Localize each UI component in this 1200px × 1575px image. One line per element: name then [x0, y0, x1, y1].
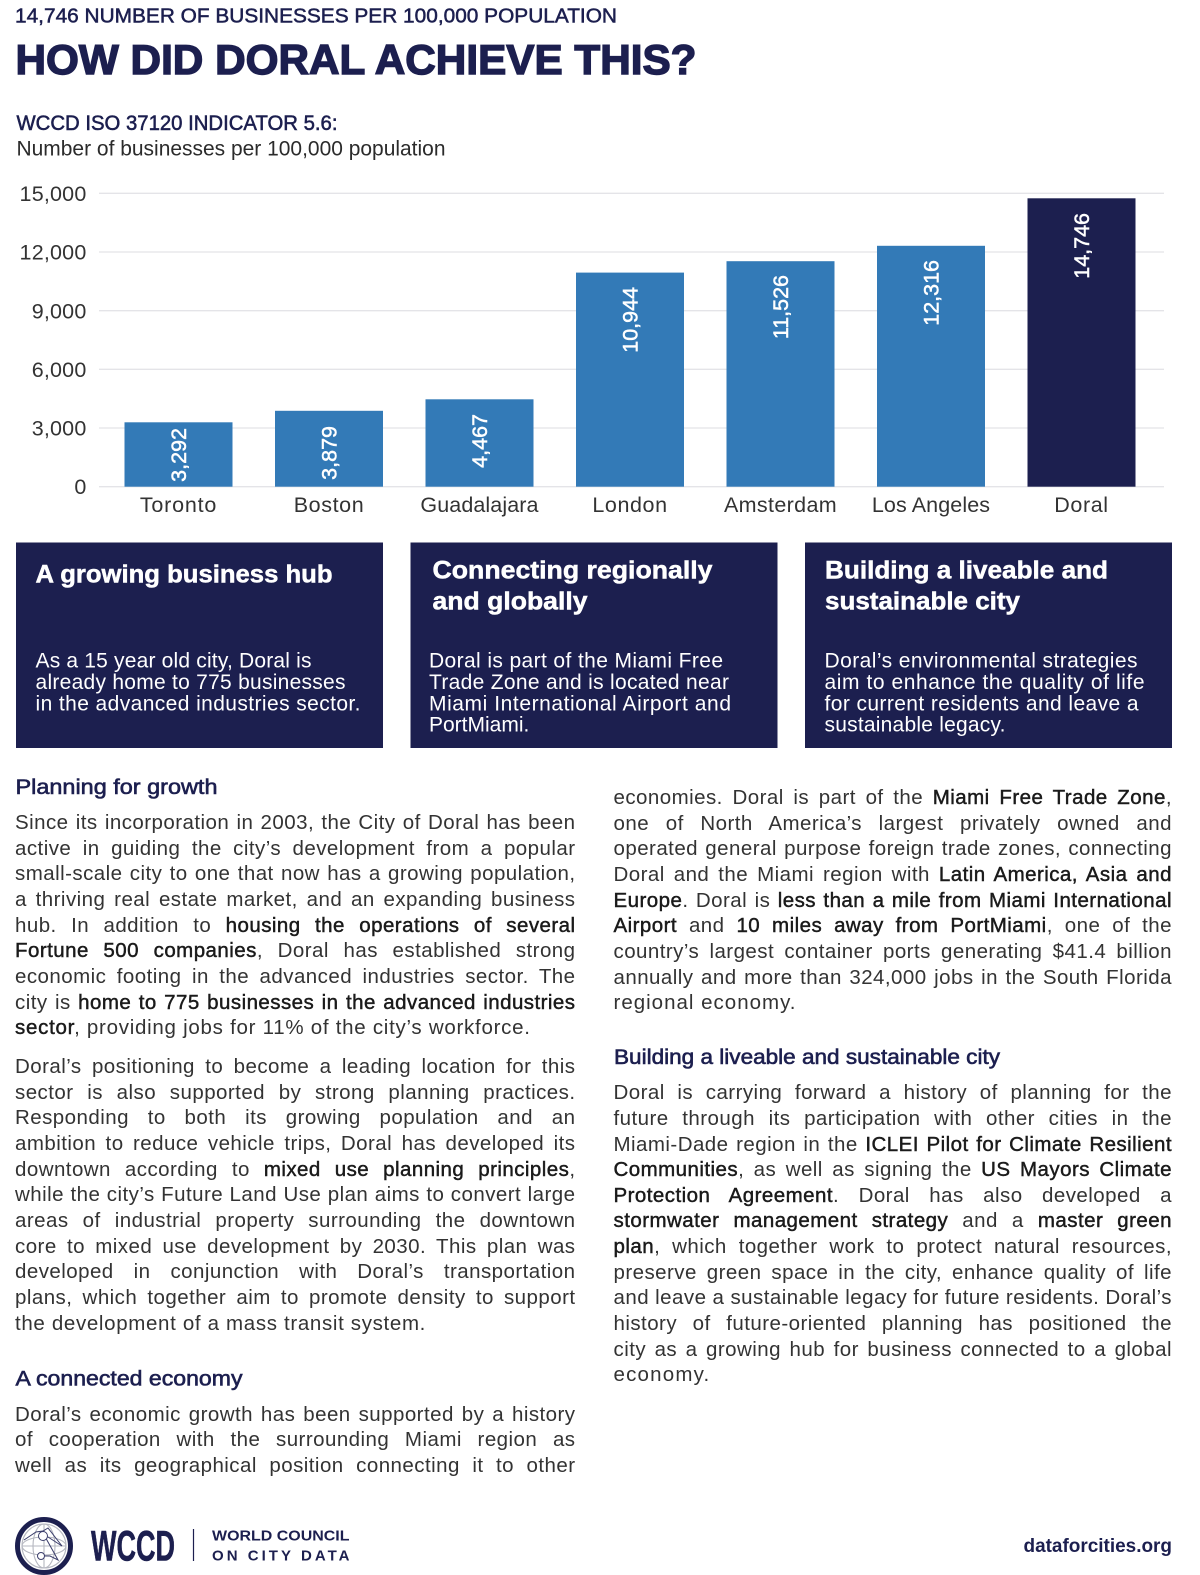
category labels	[140, 493, 1109, 517]
text block: building a liveable and sustainable city: city as a growing hub for business connected to a global	[614, 1338, 1172, 1361]
y axis labels	[20, 182, 86, 499]
category labels: Amsterdam	[724, 493, 837, 517]
text block: building a liveable and sustainable city: future through its participation with other cities in the	[614, 1107, 1172, 1130]
y axis labels: 12,000	[20, 241, 86, 265]
text block: a connected economy	[15, 1403, 576, 1477]
category labels: Boston	[294, 493, 364, 517]
panel: building a liveable and sustainable city: aim to enhance the quality of life	[824, 671, 1144, 694]
panel: connecting regionally and globally	[410, 542, 778, 748]
footer logo	[18, 1520, 350, 1572]
text block: planning for growth paragraph 2: areas of industrial property surrounding the downtown	[15, 1209, 576, 1232]
bar values: 3,879	[318, 426, 342, 480]
chart heading	[16, 112, 446, 161]
text block: a connected economy continued	[613, 786, 1172, 1014]
text block: planning for growth paragraph 2: developed in conjunction with Doral’s transportation	[15, 1260, 576, 1283]
text block: planning for growth paragraph 2: Doral’s positioning to become a leading location for this	[15, 1055, 576, 1078]
panel: connecting regionally and globally: Doral is part of the Miami Free	[429, 650, 723, 673]
text block: planning for growth paragraph 1: hub. In addition to housing the operations of several	[15, 914, 576, 937]
panel: building a liveable and sustainable city: sustainable legacy.	[824, 714, 1006, 737]
bar values: 14,746	[1070, 213, 1094, 279]
chart heading: WCCD ISO 37120 INDICATOR 5.6:	[16, 112, 338, 135]
eyebrow heading: 14,746 NUMBER OF BUSINESSES PER 100,000 POPULATION	[15, 6, 617, 28]
bar values: 11,526	[769, 275, 793, 339]
heading: a connected economy: A connected economy	[16, 1368, 243, 1391]
footer logo: WORLD COUNCIL	[212, 1528, 350, 1545]
text block: planning for growth paragraph 2: while the city’s Future Land Use plan aims to convert large	[15, 1183, 576, 1206]
text block: planning for growth paragraph 2: downtown according to mixed use planning principles,	[15, 1158, 576, 1181]
text block: planning for growth paragraph 1: small-scale city to one that now has a growing population,	[15, 862, 576, 885]
text block: a connected economy continued: annually and more than 324,000 jobs in the South Florida	[614, 966, 1172, 989]
text block: planning for growth paragraph 2: sector is also supported by strong planning practices.	[15, 1081, 576, 1104]
bar chart	[20, 182, 1164, 517]
panel: connecting regionally and globally: Connecting regionally	[432, 557, 713, 585]
text block: building a liveable and sustainable city: Doral is carrying forward a history of planning for the	[614, 1081, 1172, 1104]
text block: planning for growth paragraph 1: sector, providing jobs for 11% of the city’s workforce.	[15, 1016, 531, 1039]
category labels: Toronto	[140, 493, 217, 517]
text block: planning for growth paragraph 2: core to mixed use development by 2030. This plan was	[15, 1235, 576, 1258]
text block: planning for growth paragraph 2: the development of a mass transit system.	[15, 1312, 426, 1335]
text block: a connected economy continued: one of North America’s largest privately owned and	[614, 812, 1172, 835]
text block: building a liveable and sustainable city: economy.	[614, 1363, 710, 1386]
footer logo: ON CITY DATA	[212, 1548, 350, 1565]
text block: planning for growth paragraph 1	[15, 811, 576, 1039]
chart heading: Number of businesses per 100,000 population	[16, 138, 446, 161]
y axis labels: 0	[74, 475, 86, 499]
text block: a connected economy continued: Doral and the Miami region with Latin America, Asia and	[614, 863, 1172, 886]
panel: connecting regionally and globally: Trade Zone and is located near	[429, 671, 729, 694]
panel: a growing business hub	[16, 542, 383, 748]
text block: a connected economy continued: operated general purpose foreign trade zones, connecting	[614, 837, 1172, 860]
category labels: Los Angeles	[872, 493, 990, 517]
text block: planning for growth paragraph 1: Fortune 500 companies, Doral has established strong	[15, 939, 576, 962]
bars	[124, 198, 1136, 487]
text block: planning for growth paragraph 2	[15, 1055, 576, 1335]
bar values: 3,292	[167, 428, 191, 482]
text block: a connected economy continued: economies. Doral is part of the Miami Free Trade Zone,	[614, 786, 1172, 809]
footer url: dataforcities.org	[1024, 1536, 1172, 1557]
bar values	[167, 213, 1094, 482]
text block: building a liveable and sustainable city	[614, 1081, 1172, 1386]
bar values: 12,316	[920, 260, 944, 326]
icon: globe network	[18, 1520, 70, 1572]
title: HOW DID DORAL ACHIEVE THIS?	[16, 36, 696, 83]
text block: planning for growth paragraph 2: Responding to both its growing population and an	[15, 1106, 576, 1129]
panel: connecting regionally and globally: and globally	[432, 588, 588, 616]
category labels: London	[592, 493, 668, 517]
panel: a growing business hub: in the advanced industries sector.	[36, 692, 360, 715]
y axis labels: 6,000	[32, 358, 86, 382]
category labels: Guadalajara	[420, 493, 539, 517]
y axis labels: 9,000	[32, 299, 86, 323]
panel: building a liveable and sustainable city	[805, 542, 1172, 748]
bar values: 4,467	[468, 414, 492, 468]
category labels: Doral	[1054, 493, 1109, 517]
bar values: 10,944	[618, 287, 642, 353]
panel: connecting regionally and globally: PortMiami.	[429, 714, 529, 737]
text block: a connected economy: Doral’s economic growth has been supported by a history	[15, 1403, 576, 1426]
panel: a growing business hub: already home to 775 businesses	[36, 671, 346, 694]
text block: a connected economy: of cooperation with the surrounding Miami region as	[15, 1428, 576, 1451]
text block: planning for growth paragraph 1: a thriving real estate market, and an expanding business	[15, 888, 576, 911]
text block: building a liveable and sustainable city: Miami-Dade region in the ICLEI Pilot for Climate Resilient	[614, 1132, 1172, 1156]
heading: building a liveable and sustainable city: Building a liveable and sustainable city	[614, 1046, 1001, 1069]
text block: planning for growth paragraph 1: city is home to 775 businesses in the advanced industries	[15, 991, 576, 1014]
panel: connecting regionally and globally: Miami International Airport and	[429, 692, 731, 715]
panel: building a liveable and sustainable city: sustainable city	[825, 588, 1020, 616]
text block: building a liveable and sustainable city: preserve green space in the city, enhance quality of life	[614, 1261, 1172, 1284]
panel: a growing business hub: As a 15 year old city, Doral is	[36, 650, 312, 673]
text block: a connected economy continued: Europe. Doral is less than a mile from Miami International	[614, 889, 1172, 912]
y axis labels: 3,000	[32, 417, 86, 441]
text block: planning for growth paragraph 2: plans, which together aim to promote density to support	[15, 1286, 576, 1309]
panel: building a liveable and sustainable city: Doral’s environmental strategies	[824, 650, 1138, 673]
text block: planning for growth paragraph 2: ambition to reduce vehicle trips, Doral has developed its	[15, 1132, 576, 1155]
text block: a connected economy continued: regional economy.	[614, 991, 796, 1014]
heading: planning for growth: Planning for growth	[16, 776, 218, 799]
text block: building a liveable and sustainable city: Protection Agreement. Doral has also developed a	[614, 1184, 1172, 1207]
y axis labels: 15,000	[20, 182, 86, 206]
text block: a connected economy continued: country’s largest container ports generating $41.4 billion	[614, 940, 1172, 963]
text block: planning for growth paragraph 1: Since its incorporation in 2003, the City of Doral has been	[15, 811, 576, 834]
text block: a connected economy continued: Airport and 10 miles away from PortMiami, one of the	[614, 914, 1172, 937]
panel: building a liveable and sustainable city: for current residents and leave a	[824, 692, 1139, 715]
text block: planning for growth paragraph 1: active in guiding the city’s development from a popular	[15, 837, 576, 860]
text block: planning for growth paragraph 1: economic footing in the advanced industries sector. The	[15, 965, 576, 988]
text block: building a liveable and sustainable city: and leave a sustainable legacy for future residents. Doral’s	[614, 1286, 1172, 1309]
text block: a connected economy: well as its geographical position connecting it to other	[15, 1454, 576, 1477]
panel: building a liveable and sustainable city: Building a liveable and	[825, 557, 1108, 585]
text block: building a liveable and sustainable city: Communities, as well as signing the US Mayors Climate	[614, 1158, 1172, 1181]
text block: building a liveable and sustainable city: history of future-oriented planning has positioned the	[614, 1312, 1172, 1335]
wordmark: WCCD	[91, 1523, 175, 1571]
text block: building a liveable and sustainable city: stormwater management strategy and a master green	[614, 1209, 1172, 1232]
panel: a growing business hub: A growing business hub	[36, 561, 332, 589]
text block: building a liveable and sustainable city: plan, which together work to protect natural resources,	[614, 1235, 1172, 1258]
